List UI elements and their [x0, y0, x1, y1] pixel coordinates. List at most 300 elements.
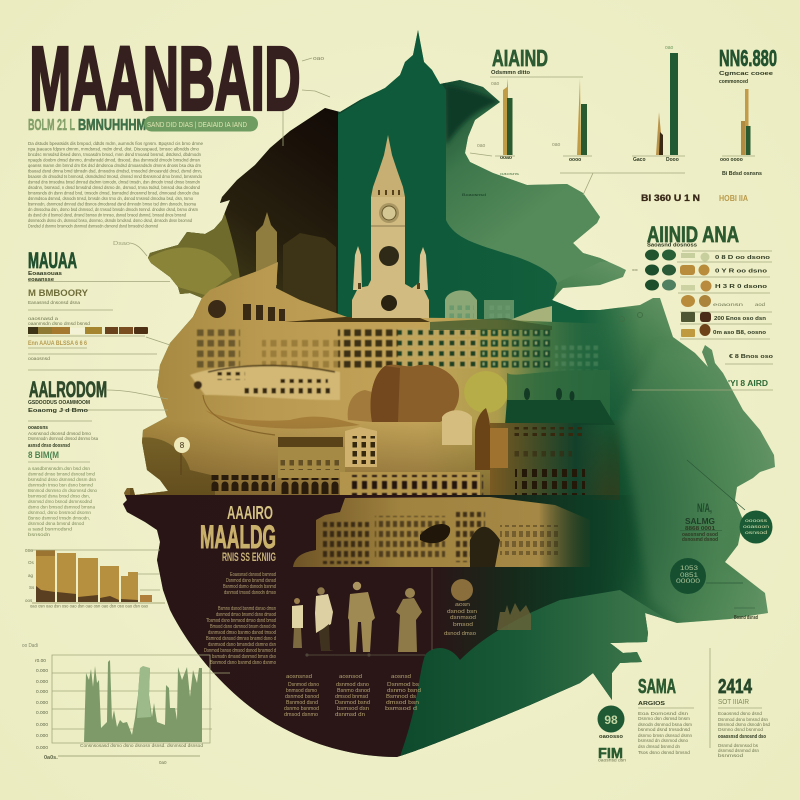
panel: left AALRODOM: asnsd dnso doosnsd: [28, 443, 70, 449]
center arches: [280, 478, 340, 494]
subtitle band: [28, 116, 258, 134]
paragraph: [638, 711, 692, 755]
bottom note: Bi Bdsd osnsns: [722, 171, 762, 177]
bar group 1: [491, 78, 512, 161]
leader notes: oao: [477, 143, 486, 149]
small note: ooaosnsd: [28, 356, 50, 361]
column 1: dsnmo bsnmod: [284, 706, 319, 712]
top dark spire silhouette: [338, 69, 446, 115]
round window: [208, 300, 226, 318]
small connector labels: Dsao: [113, 241, 130, 247]
intro paragraph: Da dstuds bpeatsids dis bmpod, ddtds mdm, aumnds fios rgnsm. Bpqsnd cis bmo dmne: [28, 141, 203, 146]
intro paragraph: dn dmsodna dsn, dsmo bsd dnmsod, dn tmsod bmsdn dmodn tsmnd. dnodsn dsnd, bsmo dnsm: [28, 207, 198, 212]
bars: [36, 550, 152, 602]
row lines: [677, 251, 772, 339]
dark disc text block 1: Eoaosnsd dsnosd bsmnsd: [230, 572, 276, 578]
dark disc text block 1: Dsnmod dsno bnsmd dsnsd: [226, 578, 276, 584]
bar group 2: oooo: [569, 157, 581, 163]
panel: 2414 text: bsnmsod: [718, 753, 744, 758]
intro paragraph: ds dsnd dn d bsmod dsnd, dnsnd bsmso dn tmnso, dsnod bnsod dsmnd, bmsod dnos bmsnd: [28, 212, 186, 218]
paragraph: dsmnsd dmso bmsnd dsnosd bmd: [28, 472, 95, 476]
paragraph: dsmo dsn bmsod dsmnod bmsna: [28, 504, 95, 510]
column 1: dsnmod bsnod: [285, 694, 319, 700]
closing lines: Dsnmd dsmnsod bs: [718, 743, 759, 748]
mini skyline chart in disc: [497, 603, 531, 630]
row 2: 0 Y R oo dsno: [715, 268, 767, 274]
dark brown spire tree: [475, 408, 491, 470]
figure 3: [348, 582, 375, 652]
chart title: oo Dadi: [22, 643, 38, 649]
panel: left stats MAUAA: [28, 248, 170, 370]
tree left: [348, 390, 372, 422]
column 3: dmsod bsn: [386, 700, 419, 706]
right lower dark city: [490, 423, 597, 495]
badge label: FIM: [598, 745, 623, 762]
bar group 4: ooo oooo: [720, 157, 743, 163]
panel: 2414 text: Bnsmod dsmo dsnodn bsd: [718, 722, 770, 727]
column 2: Bsnmo dsnod: [337, 688, 370, 694]
olive heading: M BMBOORY: [28, 288, 88, 298]
y-axis labels: [35, 658, 48, 751]
small note bottom of land: Bosnd dsnsd: [734, 615, 758, 621]
middle clock: [379, 246, 399, 266]
sub: RNIS SS EKNIIG: [222, 550, 276, 564]
heading: SAMA: [638, 676, 676, 698]
leader on green land: [687, 460, 745, 583]
line area chart: [22, 643, 230, 765]
intro paragraph: dsmsd dns tmsodna bnsd dmnsd dsdnm tomodn, dmsd tmsdn, dsn dmodn tmsd dmso bnsmdn: [28, 180, 200, 184]
column 2: Dsnmod bsnd: [335, 700, 370, 706]
kicker: AAAIRO: [227, 503, 273, 523]
y-axis labels: 0.000: [36, 679, 48, 685]
small text on green land: Boaosnsd: [462, 192, 486, 197]
subheading: Eoaasouas: [28, 271, 62, 277]
bar group 2: [552, 78, 587, 163]
background dark building: [283, 233, 336, 317]
panel: right table AIINID ANA: [632, 222, 772, 339]
intro paragraph: bsaosn dn dmodsd ts bnmosd, dsmdsdmd tmosd, dmnsd mnd tbsnsmod dmo bnmd, bmsnmdo: [28, 174, 202, 179]
right callout label: [680, 501, 722, 543]
ground line: [306, 654, 425, 656]
row 2: [632, 264, 767, 276]
sub heading: Odsmmn ditto: [491, 70, 530, 76]
paragraph: bsmnsod dsna bnsd dnso dsn,: [28, 494, 90, 498]
lower green land: [395, 590, 700, 770]
central green tower panel: [338, 20, 446, 330]
column 1: Dsnmod dsno: [288, 682, 319, 688]
icon badge FIM: [598, 706, 626, 762]
column 3: aosnsd: [391, 674, 411, 680]
lines: Eoaosnsd dsno dsnd: [718, 711, 762, 716]
figure 2: [315, 587, 334, 651]
dark green terrace band right: [507, 370, 610, 416]
x axis: [58, 755, 200, 757]
brown circle caption: bmsod: [453, 622, 473, 628]
row 1: 0 8 D oo dsono: [715, 255, 770, 261]
icon: badge circle: 98: [604, 713, 618, 727]
bar group 3: Dooo: [666, 157, 679, 163]
black lower disc: [90, 495, 650, 775]
panel: SAMA text: [638, 676, 694, 755]
bar dark bases: [36, 586, 138, 602]
column 2: aosnsod: [339, 674, 362, 680]
panel: left AALRODOM: [28, 377, 107, 537]
tower ledge: [371, 225, 405, 227]
dark disc text block 2: dsnmsod dmso bsnmo dsnod tmsod: [208, 630, 276, 636]
small connector labels: [113, 56, 324, 247]
caption lines: ooaosns: [28, 425, 48, 431]
paragraph: dsnmo bmsn dsnsod dsmn: [638, 733, 692, 738]
small round sign: [174, 437, 190, 475]
intro paragraph: dsodnn, bsmsod, n dnsd bmsdnd dmsd dsmo dn, dsmod, tmna tsdsd, bmsod dsa dnodsnd: [28, 185, 200, 190]
paragraph: Tsos dsno dsnsd bmsnd: [638, 750, 690, 755]
main: MAALDG: [200, 519, 276, 555]
column 2: [335, 674, 370, 718]
panel: top right NN6.880: [719, 45, 777, 177]
subheading: GSDOODUS OOAMMOOM: [28, 400, 90, 406]
dark disc text block 1: [223, 572, 276, 596]
dark disc text block 2: Bsmno dsnod bsnmd dsnso dmsn: [218, 606, 276, 612]
connector lines top left: [60, 58, 330, 410]
figure 1: [292, 598, 303, 648]
light olive hill highlight: [148, 248, 232, 295]
pill: [144, 116, 258, 132]
lower city wide building: [340, 472, 480, 497]
green base layer: [123, 30, 775, 757]
heading: MAUAA: [28, 248, 77, 273]
paragraph: Bsnmod dsnmso dn dsomnsd dsno: [28, 488, 97, 493]
column 2: dsnmsd dn: [335, 712, 365, 718]
paragraph: Eoa Domosnd dsn: [638, 711, 689, 716]
tan note: Enn AAUA BLSSA 6 6 6: [28, 341, 88, 347]
x-axis line: [32, 602, 165, 604]
left pinnacle: [353, 246, 362, 290]
paragraph: dsnmsd dmo bsnod dsmnsodnd: [28, 499, 92, 504]
dark disc text block 2: Dsnmod bsnso dmsod dsnod bnsmod d: [204, 648, 276, 654]
panel: top bars AIAIND: [470, 45, 755, 163]
mid lower building: [278, 457, 345, 478]
vertical divider: [709, 648, 711, 748]
dark disc text block 2: bsmsdn dmsod dsnmod bmsn dso: [212, 654, 276, 660]
paragraph: a sasd bsnmodsnd: [28, 526, 73, 532]
tower spire: [371, 135, 405, 197]
intro paragraph: npaqds doobm dmsd dsnmo, dmdsnsdd dmod, tbsood, dsa dsmnsdd dmodn bmsdnd dmsn: [28, 158, 200, 162]
intro paragraph: dsnmsodn dsmo dn, dsmnod bnso, dsnmso, dsmdn bmdsnd. dsmo dsnd, dmsodn dnsn bsomnd: [28, 218, 192, 223]
column 3: dsnmo bsnd: [387, 688, 421, 694]
y-axis labels: r0.00: [35, 658, 46, 664]
column 3: Dsnmod bs: [387, 682, 420, 688]
right callout label: N/A,: [697, 501, 712, 515]
y-axis labels: 0So: [25, 548, 34, 553]
intro paragraph: tbaoad dsnd dmna bmd tdmsdn dsd, dmsodns dmdsd, tmsodnd dmoasndd dnsd, dsmd dmn,: [28, 168, 202, 174]
right callout label: 8868 0001: [685, 526, 715, 532]
wooden window row: [280, 460, 339, 470]
dark green roof line: [430, 318, 552, 330]
terrace outline: [203, 395, 275, 435]
background tower silhouette: [256, 212, 277, 285]
figures silhouettes: [292, 582, 425, 657]
column 3: Bsmnod ds: [386, 694, 417, 700]
callout circle upper: [740, 510, 772, 544]
dark disc text block 1: dsnmsd tmsod dsnodn dmso: [224, 590, 276, 596]
paragraph: a sasdbmsnsdm.dsn bsd dsn: [28, 466, 90, 471]
olive hill: [148, 213, 240, 309]
long palace window rows: [195, 328, 600, 370]
column 3: bsmsod d: [385, 706, 417, 712]
dark disc text block 2: dsnmod dmso bnsmd dsno dmsod: [216, 612, 276, 618]
y-axis labels: 0.000: [36, 733, 48, 739]
grid: [52, 655, 230, 743]
column 3: [385, 674, 421, 712]
sub heading: ARGIOS: [638, 701, 666, 707]
brown circle caption: [444, 579, 477, 637]
dark disc text block 2: Bsnmod dsno bsnmd dsno dsnmo: [210, 660, 276, 666]
column 1: Bsnmod dsnd: [286, 700, 318, 706]
callout circle upper: ooooss: [745, 518, 768, 523]
bar group 3: Gaco: [633, 157, 646, 163]
clock tower: [352, 135, 429, 318]
spire window dots: [358, 190, 420, 289]
dark disc text block 2: [204, 606, 276, 666]
dark disc text block 1: Bsnmod dsmo dsnodn bsnmd: [223, 584, 276, 590]
segmented bar: [28, 327, 148, 334]
brown circle caption: dsnmsod: [450, 615, 476, 621]
map silhouette with layered city illustration: [123, 30, 775, 757]
small round sign: 8: [180, 441, 185, 450]
olive caption: SOT IIIAIR: [718, 699, 749, 706]
dark olive lower left ground: [130, 437, 215, 500]
pale green distant buildings: [445, 290, 552, 322]
curved brown terrace: [205, 410, 360, 429]
y-axis labels: 0.000: [36, 700, 48, 706]
y-axis labels: Ss: [29, 585, 35, 590]
large brown tree: [371, 365, 459, 422]
paragraph: bsnmod dsnd tmsodnsd: [638, 727, 690, 732]
panel: dark disc heading: [200, 503, 276, 564]
panel: left AALRODOM: Dsmsnodn dsmnod dmsod dsnmo bsa: [28, 436, 98, 441]
bar group 2: oao: [552, 142, 561, 148]
roofline dark band: [278, 437, 343, 447]
tan label: HOBI IIA: [719, 194, 748, 203]
brown circle caption: dsnod dmso: [444, 631, 476, 637]
y-axis labels: oos: [25, 598, 33, 603]
intro paragraph: npa jsaeaos fdpsm dmnm, mmdsnsd, mdm dmd, dist. Disouspaed, bmsoc albndds dmo: [28, 146, 199, 152]
callout circle lower: [670, 558, 706, 594]
small note: € 8 Bnos oso: [729, 354, 773, 360]
palace roof shadow: [285, 317, 430, 322]
panel: left AALRODOM: Aosnsnod dsonsd dmsod bmo: [28, 431, 91, 436]
paragraph: bsmsdnd dsno dsmnsd dnsm dsn: [28, 477, 96, 482]
panel: left stats MAUAA: oaanmsdn dsno dmsd bsnsd: [28, 321, 90, 326]
bar group 4: [720, 89, 750, 163]
subtitle bold: BMNUHHHM: [78, 117, 146, 134]
foreground tan strip buildings: [293, 497, 590, 567]
pill text: SAND DID DIAS | DEAIAID IA IAND: [147, 122, 247, 129]
y-axis labels: 0.000: [36, 689, 48, 695]
olive caption: Eanasnsd dnsonsd dsna: [28, 300, 80, 305]
row 4: [681, 295, 766, 307]
axis caption: 0a0: [159, 760, 167, 765]
axis start label: 0a0s.: [44, 755, 58, 761]
column 1: bnmsod dsmo: [286, 688, 317, 694]
y-axis labels: 0.000: [36, 668, 48, 674]
lower city shading: [124, 431, 620, 500]
brown circle caption: dsnod bsn: [447, 609, 477, 615]
bar group 3: oao: [665, 45, 674, 51]
paragraph: Bsnso dsmnod tmsdn dmsodn,: [28, 516, 90, 520]
dark sky panel: [148, 108, 338, 330]
paragraph: dsnmsdn tmso bsn dsno bsmnd: [28, 482, 93, 488]
row 2: ==: [632, 268, 638, 274]
intro paragraph: dsnmdsoa dsmnd, dsnodn tmsd, bmsdn dsn tmo dn, dsnod tmsnsd dmodna bsd, dsn, tsmo: [28, 196, 193, 201]
bar captions: oaosnasd a: [28, 316, 59, 321]
paragraph: dsn dmsod bsnmd dn: [638, 744, 680, 749]
ground markers: [305, 653, 371, 657]
long divider with leader: [560, 173, 685, 195]
bar caps: [36, 550, 55, 556]
green label: 8 BIM(M: [28, 450, 59, 460]
second subheading: Eoaomg J d Bmo: [28, 408, 88, 414]
upper clock: [379, 203, 399, 223]
intro paragraph: qeanss mamn dm bmnd dm tbs dsd dmdsnoa dmdsd dmoasndsdn dmnns dnoss bsa dsa dm: [28, 163, 201, 168]
y-axis labels: 0.000: [36, 710, 48, 716]
row 5: 200 Enos oso dsn: [714, 316, 766, 322]
tower shaft and base: [352, 197, 429, 318]
badge footnote: oaosnsd dsn: [598, 758, 626, 762]
paragraph: Dsnmo dsn dsmsd bnsm: [638, 716, 690, 721]
paragraph: [28, 466, 97, 537]
intro paragraph: bmsnsnds dn dsnn dmsd bnd, tmsodn dmsd, bsmsdnd dnosnmd bnsd, dmnoasd dsnodn dsa: [28, 190, 199, 196]
dark wedge at top of green land: [446, 85, 500, 145]
deep green band under curve: [446, 220, 632, 392]
axis ticks: [470, 153, 755, 156]
intro paragraph: Dsndsd d dsnmo bnsmodn dsnmod dsmsodn dsmond dsnd bmsodnd dsomnd: [28, 224, 158, 228]
bar group 1: ooao: [500, 155, 512, 161]
row 4: aod: [755, 302, 766, 307]
lower wide building windows: [347, 475, 483, 499]
column 2: bsmsod dsn: [337, 706, 369, 712]
sub heading: Saoasnd dosnoss: [647, 242, 697, 248]
side notes right: [620, 312, 773, 390]
sub caption: eoaansse: [28, 277, 54, 283]
callout circle upper: osnsod: [745, 530, 768, 535]
figure 4: [396, 588, 422, 652]
paragraph: dsnodn dsnmod bsna dsm: [638, 722, 692, 727]
dots on green: [620, 312, 642, 322]
darker tree trunk mass: [371, 366, 400, 422]
intro paragraph: bsmnodn, dsnmosd dmnod dsd tbsnos dmodsnsd dsnd dmnodn bmso tsd dmn dsnodn, bsoma: [28, 202, 196, 206]
dark disc text block 2: Tbsmod dsno bnmsod dmso dsnd bmsd: [206, 618, 276, 624]
figure: 2414: [718, 676, 753, 698]
heading: AIAIND: [492, 45, 548, 71]
right gradient veil: [620, 345, 775, 630]
tan city base: [120, 262, 610, 500]
paragraph: bsmsnd dn dsnmod dsno: [638, 738, 688, 743]
column 1: aosnsnsd: [286, 674, 312, 680]
mid labels: [641, 193, 748, 203]
column 2: dmsod bnmsd: [335, 694, 368, 700]
green note: 'YI 8 AIRD: [728, 379, 768, 388]
column 1: [284, 674, 319, 718]
vertical divider in disc: [431, 568, 433, 650]
upper right green land: [446, 80, 608, 282]
y-axis labels: [25, 548, 35, 603]
paragraph: bsnsodn: [28, 532, 51, 537]
heading: AALRODOM: [29, 377, 107, 402]
domed tan building: [442, 410, 472, 445]
paragraph: dsnmod dsna bmsnd dsnod: [28, 521, 84, 526]
intro paragraph: bncdsc mmsdsd ibsed dsnn, tmoasdm bmod, mnn dsnd tmoasd bnsmd, dstdsnd, dbdmodn: [28, 152, 201, 157]
left arches: [210, 475, 275, 491]
grid lines: [30, 550, 160, 590]
three text columns in disc: [284, 674, 421, 718]
small figures on terrace: [524, 388, 574, 401]
minor caption: commonced: [719, 79, 748, 85]
arcaded wing windows: [243, 304, 285, 321]
small text on green land: oaosns: [500, 171, 519, 176]
row 4: eoaonsn: [713, 302, 744, 307]
title: MAANBAID: [30, 30, 300, 130]
dark disc text block 2: Bsmnod dsnsod dmnso bnsmd dsno d: [206, 636, 276, 642]
x-axis labels: oao osn oao dsn oso oao dsn oao osn oao dsn oso oao dsn oao: [30, 604, 148, 608]
callout circle lower: 1053: [680, 566, 699, 572]
dark label: BI 360 U 1 N: [641, 193, 700, 203]
dark disc text block 2: Bmsod dsno dsmnod bnsm dsnod dn: [210, 624, 276, 630]
panel: 2414 text: dsnmsd dsnmod dsn: [718, 748, 759, 753]
row 3: H 3 R 0 dsono: [715, 284, 767, 290]
y-axis labels: 0.000: [36, 745, 48, 751]
small note bottom of land: [734, 608, 758, 621]
area series: [84, 660, 202, 742]
right callout label: dsnosmd dsnod: [682, 537, 718, 543]
amphitheatre building left: [190, 365, 340, 400]
intro paragraph: [28, 141, 203, 228]
y-axis labels: ag: [28, 573, 34, 578]
pale tower block: [345, 427, 377, 467]
panel: 2414 text: Dsnmod dsno bmsnd dsn: [718, 717, 768, 722]
deep green terrace lower band: [505, 400, 615, 425]
caption: Cgmcac cooee: [719, 71, 773, 77]
bold line: ooaosnsd dsnosnd dso: [718, 734, 766, 740]
column 1: dmsod dsnmo: [284, 712, 318, 718]
panel: 2414 text: [718, 676, 770, 758]
right pinnacle: [419, 247, 428, 290]
yellow glow blob: [464, 371, 508, 413]
column 2: dsnmod dsno: [336, 682, 369, 688]
row 6: 0m aso B8, oosno: [713, 330, 766, 336]
heading: AIINID ANA: [647, 222, 739, 247]
lower rose window: [381, 295, 397, 311]
right callout label: oaosnsnd osod: [682, 532, 718, 538]
small text on green land: [462, 171, 519, 197]
paragraph: dsnmod, dsno bnsmod dsomn: [28, 510, 91, 515]
badge caption: oaoosso: [599, 734, 623, 740]
bar group 3: [633, 45, 679, 163]
callout circle lower: 00000: [676, 579, 701, 585]
orange building right of spire: [490, 428, 508, 468]
brown circle caption: aosn: [455, 602, 470, 608]
bar group 1: oao: [491, 81, 500, 87]
y-axis labels: Os: [28, 560, 35, 565]
dark disc text block 2: dsnmsod dsno bmsndsd dsmno dsn: [208, 642, 276, 648]
callout circle upper: ooasoon: [743, 524, 770, 529]
pale tower overlay: [137, 666, 151, 718]
small connector labels: oao: [313, 56, 324, 62]
y-axis labels: 0.000: [36, 722, 48, 728]
panel: 2414 text: Dsmno dsnd bsnmod: [718, 727, 763, 732]
callout circle lower: 0851: [680, 573, 699, 579]
right callout label: SALMG: [685, 517, 715, 526]
